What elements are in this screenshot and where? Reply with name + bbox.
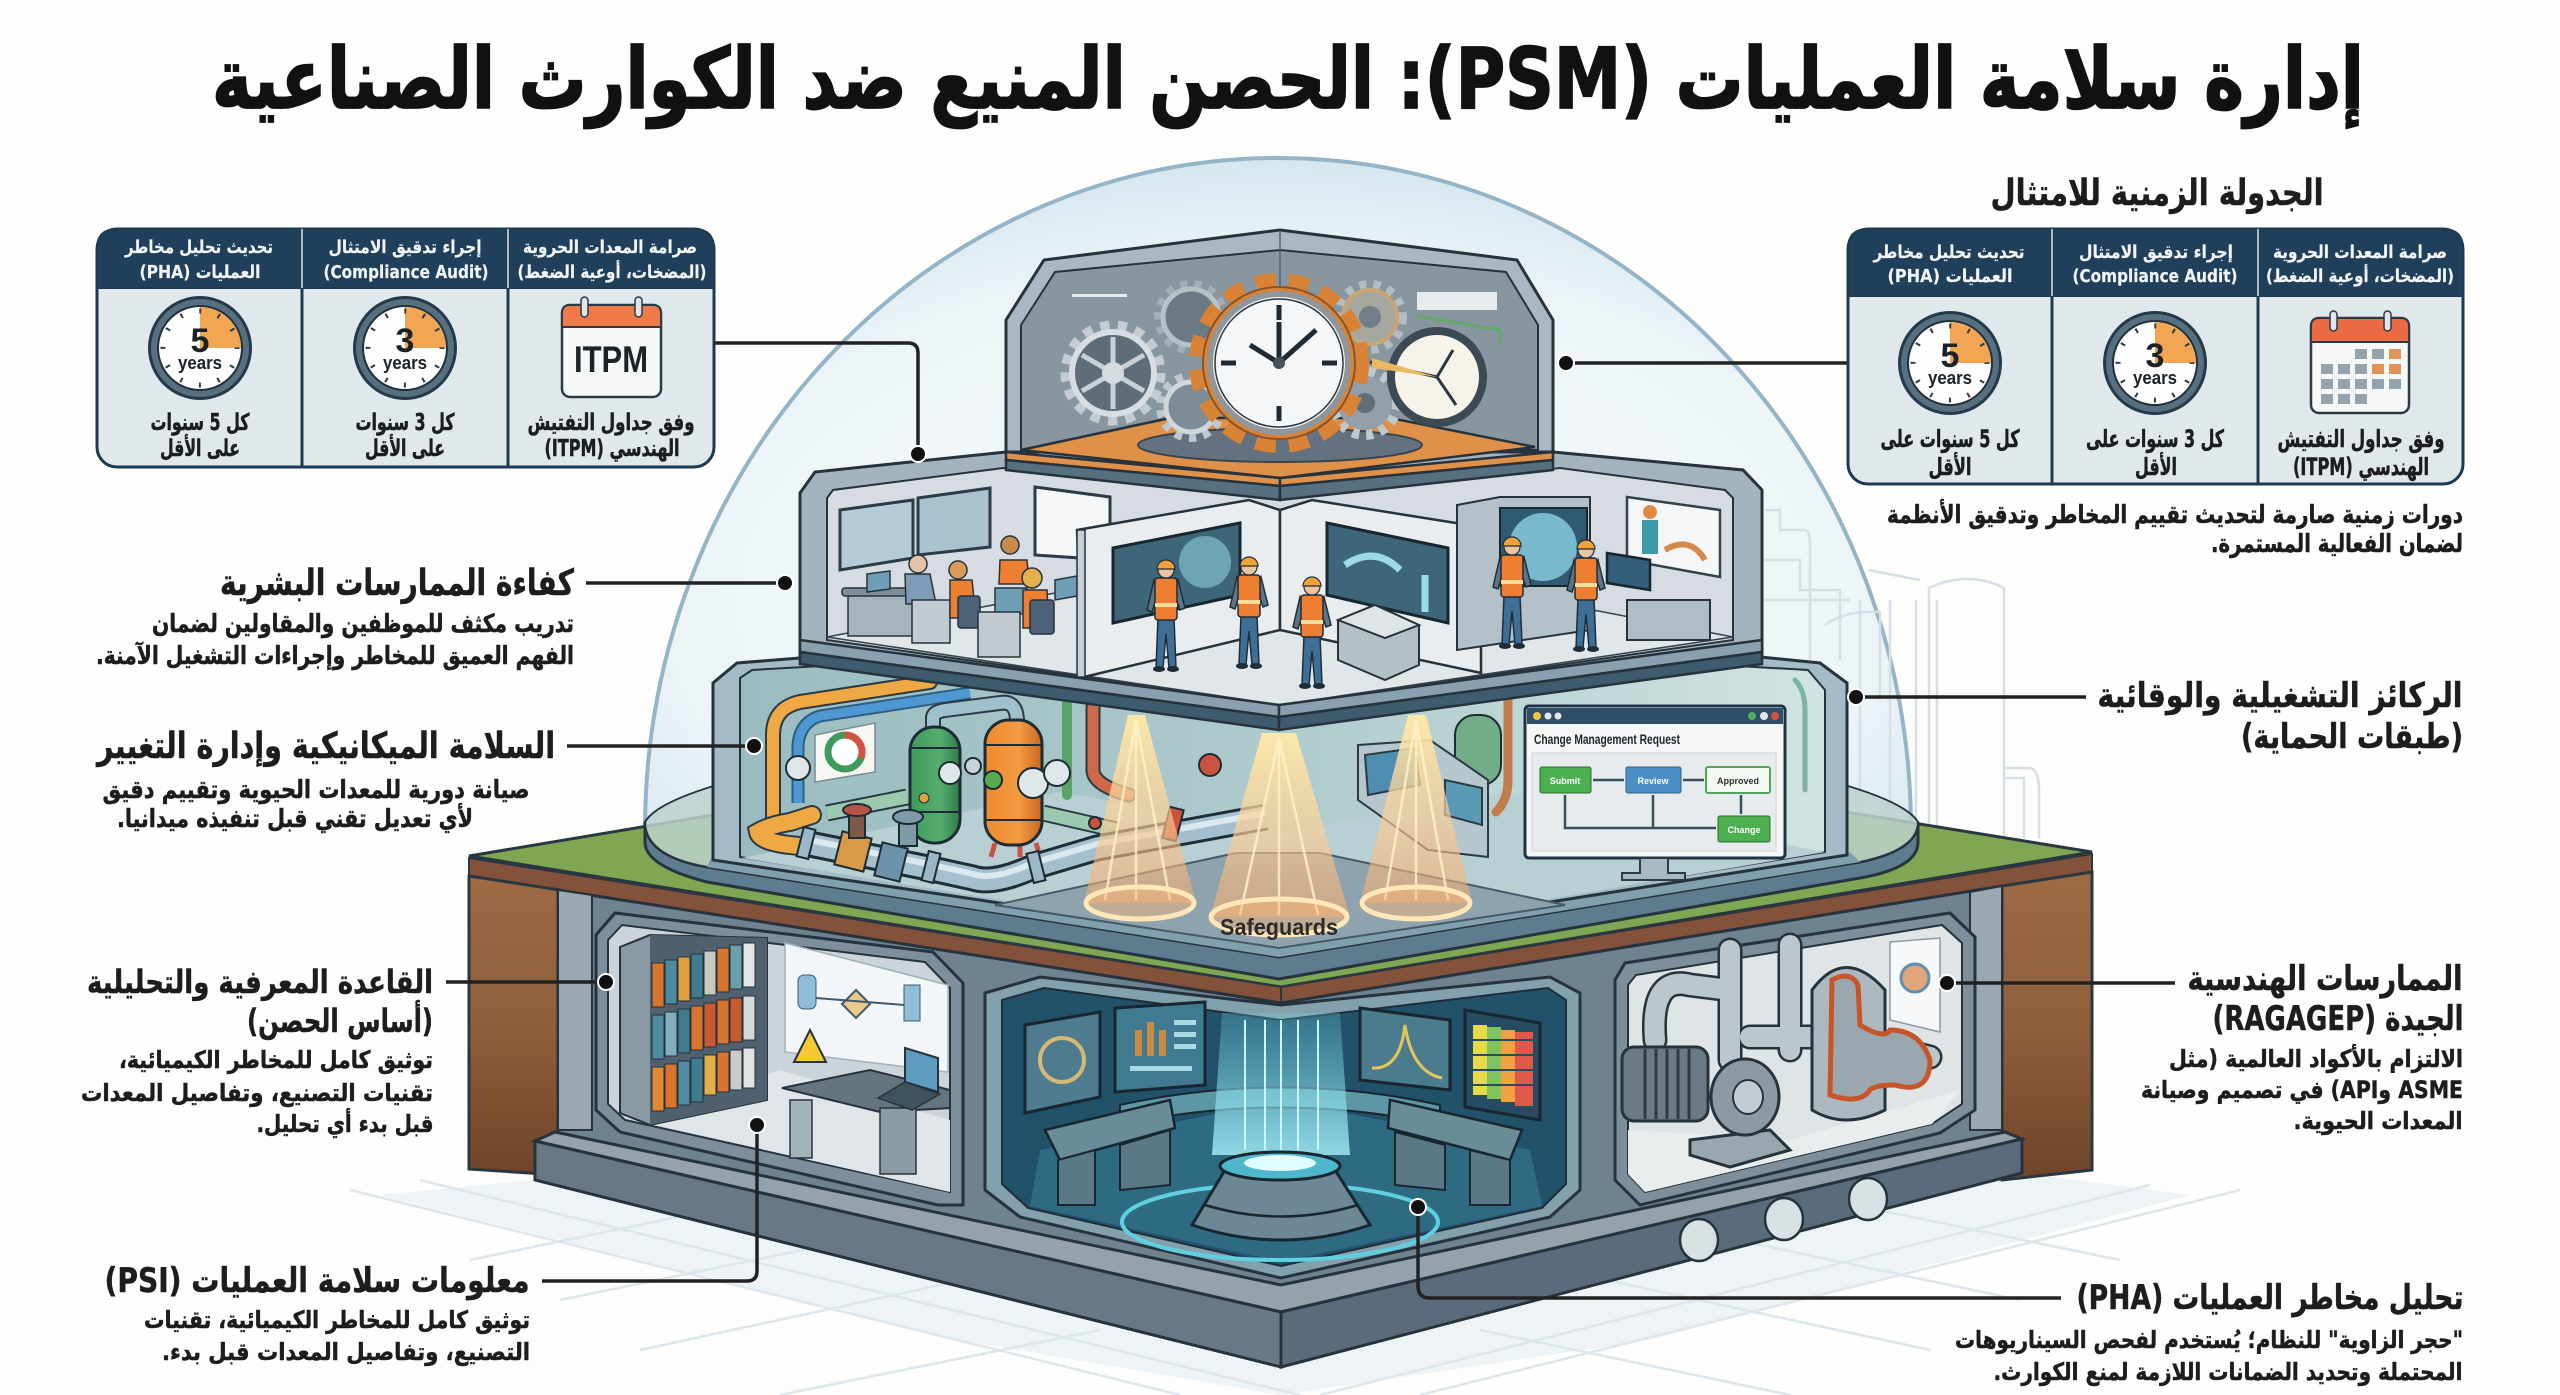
change management window xyxy=(1525,706,1785,880)
curved console xyxy=(1045,1088,1522,1205)
monitor stand xyxy=(1622,858,1685,880)
connector: left schedule to clock tier xyxy=(715,343,926,462)
base plinth xyxy=(535,1132,2022,1367)
header text: إجراء تدقيق الامتثال xyxy=(2079,242,2233,263)
header text: تحديث تحليل مخاطر xyxy=(1873,242,2024,263)
icon: 3 years clock: 3 xyxy=(2146,337,2164,375)
poster xyxy=(1890,938,1940,1032)
icon: 3 years clock: years xyxy=(2133,368,2177,388)
safeguards plate xyxy=(995,853,1565,948)
icon: 3 years clock: years xyxy=(383,353,427,373)
callout: RAGAGEP xyxy=(1939,959,2464,1135)
body text: الأقل xyxy=(1928,452,1972,481)
dome xyxy=(645,158,1911,880)
change management window: Change Management Request xyxy=(1534,731,1680,747)
training slab xyxy=(800,640,1762,730)
callout: operational pillars xyxy=(1848,676,2463,757)
soil and grass xyxy=(469,720,2092,1180)
header text: صرامة المعدات الحروية xyxy=(2273,242,2447,263)
panel: left schedule table xyxy=(97,229,714,467)
icon: calendar grid xyxy=(2311,311,2409,413)
back pipes xyxy=(1067,680,1805,812)
header text: تحديث تحليل مخاطر xyxy=(124,237,273,258)
header text: (Compliance Audit) xyxy=(2072,266,2238,287)
blue pipe xyxy=(798,693,970,803)
callout: knowledge base xyxy=(81,963,614,1138)
callout: knowledge base: قبل بدء أي تحليل. xyxy=(256,1108,434,1138)
orange pipe xyxy=(758,682,930,846)
pipework xyxy=(1654,945,1930,1060)
callout: PSI: توثيق كامل للمخاطر الكيميائية، تقنيات xyxy=(144,1306,530,1334)
panel: training tier xyxy=(800,440,1762,730)
orange tank xyxy=(984,720,1070,857)
plinth portholes xyxy=(1680,1178,1887,1261)
body text xyxy=(150,410,694,462)
body text: على الأقل xyxy=(365,433,445,462)
flow boxes: Change xyxy=(1727,825,1761,835)
secondary clock xyxy=(1370,331,1483,423)
callout: RAGAGEP: الالتزام بالأكواد العالمية (مثل xyxy=(2169,1044,2463,1073)
body text: على الأقل xyxy=(160,433,240,462)
header text: إجراء تدقيق الامتثال xyxy=(328,237,482,258)
panel: control room xyxy=(985,977,1580,1278)
flow boxes: Submit xyxy=(1550,776,1580,786)
centrifugal pump xyxy=(1622,1047,1790,1167)
panel: archive room xyxy=(596,913,963,1205)
panel: right schedule table xyxy=(1848,229,2463,484)
icon: 5 years clock xyxy=(1898,311,2002,415)
callout: knowledge base: تقنيات التصنيع، وتفاصيل المعدات xyxy=(81,1079,433,1107)
body text xyxy=(1880,425,2444,481)
core reactor xyxy=(1192,1152,1370,1240)
icon: 3 years clock: 3 xyxy=(396,322,414,360)
poster with figure and right desk xyxy=(1607,497,1720,640)
faint background plant xyxy=(1765,510,2039,850)
callout: RAGAGEP: الجيدة (RAGAGEP) xyxy=(2212,999,2464,1039)
callout: knowledge base: توثيق كامل للمخاطر الكيميائية، xyxy=(119,1046,433,1074)
callout: knowledge base: القاعدة المعرفية والتحليلية xyxy=(87,963,433,1001)
flow boxes xyxy=(1540,767,1770,842)
workers xyxy=(1147,537,1605,689)
steel main pipe xyxy=(800,813,1266,880)
body text: وفق جداول التفتيش xyxy=(528,410,694,436)
hologram beam xyxy=(1212,1013,1350,1155)
header text xyxy=(124,237,707,283)
bookshelf xyxy=(620,935,767,1125)
dome floor slab xyxy=(645,700,1918,979)
header text: (Compliance Audit) xyxy=(324,262,488,283)
body text: كل 5 سنوات xyxy=(150,410,250,436)
body text: كل 3 سنوات على xyxy=(2086,425,2224,453)
header text: (المضخات، أوعية الضغط) xyxy=(2266,264,2454,287)
safeguard light cones xyxy=(1084,715,1472,940)
body text: وفق جداول التفتيش xyxy=(2278,425,2444,453)
text block: schedule description xyxy=(1887,499,2463,559)
callout: PSI: التصنيع، وتفاصيل المعدات قبل بدء. xyxy=(162,1338,530,1366)
bunker wall xyxy=(558,886,2002,1290)
flow boxes: Approved xyxy=(1717,776,1759,786)
left partition xyxy=(1077,500,1280,677)
table header band xyxy=(97,229,714,288)
data screens xyxy=(1025,1002,1540,1120)
wall screens and poster xyxy=(840,487,1110,570)
heat map xyxy=(1473,1025,1533,1106)
status poster xyxy=(815,723,875,782)
callout: PHA: المحتملة وتحديد الضمانات اللازمة لمنع الكوارث. xyxy=(1994,1358,2462,1386)
callout: RAGAGEP: ASME وAPI) في تصميم وصيانة xyxy=(2141,1076,2463,1104)
process diagram board xyxy=(785,943,948,1072)
callout: operational pillars: الركائز التشغيلية والوقائية xyxy=(2098,676,2462,716)
callout: human competence: تدريب مكثف للموظفين والمقاولين لضمان xyxy=(152,609,574,639)
panel: clock tier xyxy=(1006,230,1553,500)
callout: PHA: تحليل مخاطر العمليات (PHA) xyxy=(2076,1278,2464,1318)
icon: calendar ITPM xyxy=(562,297,661,397)
callout: PSI: معلومات سلامة العمليات (PSI) xyxy=(104,1261,530,1301)
body text: الأقل xyxy=(2135,452,2177,481)
vessel with exchanger xyxy=(1812,968,1930,1120)
control cabinets xyxy=(1358,740,1488,857)
flow boxes: Review xyxy=(1637,776,1670,786)
orange floor xyxy=(1021,418,1535,478)
icon: 5 years clock: 5 xyxy=(1941,337,1959,375)
callout: mechanical integrity: صيانة دورية للمعدات الحيوية وتقييم دقيق xyxy=(102,775,530,805)
heading: compliance timeline: الجدولة الزمنية للامتثال xyxy=(1990,173,2324,214)
connector: clock tier to right schedule xyxy=(1558,355,1847,371)
green tank xyxy=(910,727,981,843)
header text: العمليات (PHA) xyxy=(1888,266,2012,287)
body text: الهندسي (ITPM) xyxy=(544,436,680,462)
wall readouts xyxy=(1072,292,1500,345)
callout: mechanical integrity xyxy=(95,726,762,834)
icon: calendar ITPM: ITPM xyxy=(574,339,648,380)
panel: operational tier xyxy=(713,620,1847,948)
connecting pipe xyxy=(933,703,1017,727)
clock tier slab xyxy=(1006,452,1553,500)
callout: human competence xyxy=(96,563,793,671)
warning sign xyxy=(794,1030,826,1062)
green branch pipes xyxy=(827,797,1117,830)
header text: صرامة المعدات الحروية xyxy=(523,237,697,258)
floor ring xyxy=(1122,1184,1438,1260)
foundation and underground xyxy=(469,720,2092,1367)
cabinet with round screen xyxy=(1457,497,1590,650)
gears xyxy=(1067,285,1402,437)
callout: mechanical integrity: السلامة الميكانيكية وإدارة التغيير xyxy=(95,726,555,767)
header text: العمليات (PHA) xyxy=(140,262,260,283)
seated staff and desks xyxy=(842,536,1077,657)
ground grid xyxy=(350,1173,2240,1395)
icon: 5 years clock: years xyxy=(1928,368,1972,388)
panel: machinery room xyxy=(1615,913,1975,1205)
icon: 5 years clock: 5 xyxy=(191,322,209,360)
tier floor xyxy=(742,792,1825,945)
icon: 3 years clock xyxy=(353,296,457,400)
callout: PHA: "حجر الزاوية" للنظام؛ يُستخدم لفحص السيناريوهات xyxy=(1955,1326,2463,1354)
header text xyxy=(1873,242,2454,287)
callout: PSI xyxy=(104,1117,765,1366)
training floor xyxy=(827,592,1733,705)
callout: human competence: الفهم العميق للمخاطر وإجراءات التشغيل الآمنة. xyxy=(96,641,574,671)
main clock xyxy=(1197,281,1361,445)
callout: RAGAGEP: الممارسات الهندسية xyxy=(2188,959,2462,999)
callout: mechanical integrity: لأي تعديل تقني قبل تنفيذه ميدانيا. xyxy=(117,803,473,834)
callout: operational pillars: (طبقات الحماية) xyxy=(2241,717,2463,757)
right partition xyxy=(1280,500,1481,673)
body text: كل 3 سنوات xyxy=(356,410,455,436)
icon: 5 years clock xyxy=(148,296,252,400)
callout: human competence: كفاءة الممارسات البشرية xyxy=(220,563,574,604)
text block: schedule description: لضمان الفعالية المستمرة. xyxy=(2211,529,2463,559)
icon: 5 years clock: years xyxy=(178,353,222,373)
icon: 3 years clock xyxy=(2103,311,2207,415)
table header band xyxy=(1848,229,2463,296)
header text: (المضخات، أوعية الضغط) xyxy=(518,260,706,283)
title: إدارة سلامة العمليات (PSM): الحصن المنيع ضد الكوارث الصناعية xyxy=(212,30,2364,129)
callout: PHA xyxy=(1410,1199,2464,1386)
callout: knowledge base: (أساس الحصن) xyxy=(247,1000,433,1040)
far green tank xyxy=(1455,715,1501,785)
safeguards label: Safeguards xyxy=(1220,914,1338,940)
body text: الهندسي (ITPM) xyxy=(2293,453,2429,481)
body text: كل 5 سنوات على xyxy=(1880,425,2020,453)
pipe fittings and valves xyxy=(786,754,1221,883)
callout: RAGAGEP: المعدات الحيوية. xyxy=(2294,1107,2462,1135)
pedestal xyxy=(1338,605,1419,680)
desk and laptop xyxy=(782,1048,950,1174)
